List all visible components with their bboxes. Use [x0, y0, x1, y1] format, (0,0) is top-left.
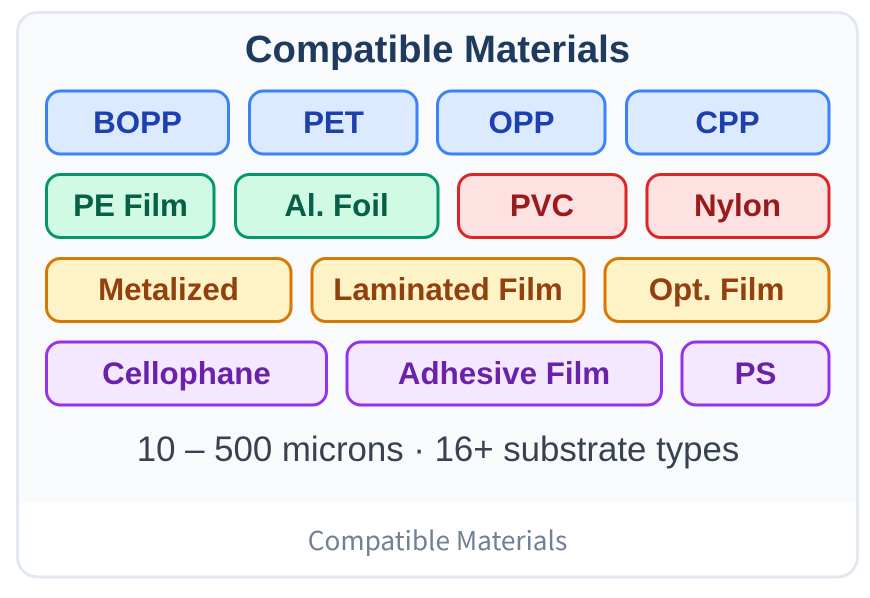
pill: Opt. Film: [605, 258, 829, 322]
pill: Laminated Film: Laminated Film: [333, 272, 563, 307]
pill: PET: [250, 91, 417, 154]
pill: CPP: [626, 91, 829, 154]
pill: OPP: OPP: [488, 105, 555, 140]
pill: Cellophane: [46, 342, 326, 405]
pill: Laminated Film: [312, 258, 584, 322]
title: Compatible Materials: [245, 28, 630, 71]
subtitle: 10 – 500 microns · 16+ substrate types: [137, 430, 739, 469]
pill: Adhesive Film: Adhesive Film: [398, 356, 610, 391]
pill: PVC: [458, 174, 626, 238]
pill: Al. Foil: [236, 174, 438, 238]
pill: Adhesive Film: [347, 342, 662, 405]
pill: PET: PET: [303, 105, 364, 140]
pill: BOPP: BOPP: [93, 105, 182, 140]
pill: PE Film: [46, 174, 214, 238]
pill: Al. Foil: Al. Foil: [284, 188, 389, 223]
pill: Metalized: [46, 258, 291, 322]
pill: PS: [682, 342, 829, 405]
pill: Metalized: Metalized: [98, 272, 239, 307]
pill: BOPP: [46, 91, 228, 154]
pill: PVC: PVC: [510, 188, 574, 223]
pill: Nylon: Nylon: [694, 188, 781, 223]
pill: PS: PS: [735, 356, 776, 391]
pill: CPP: CPP: [695, 105, 760, 140]
pill: PE Film: PE Film: [73, 188, 188, 223]
pill: Nylon: [647, 174, 829, 238]
pill: OPP: [438, 91, 605, 154]
pill: Opt. Film: Opt. Film: [649, 272, 784, 307]
pill: Cellophane: Cellophane: [102, 356, 271, 391]
caption: Compatible Materials: [308, 520, 567, 558]
